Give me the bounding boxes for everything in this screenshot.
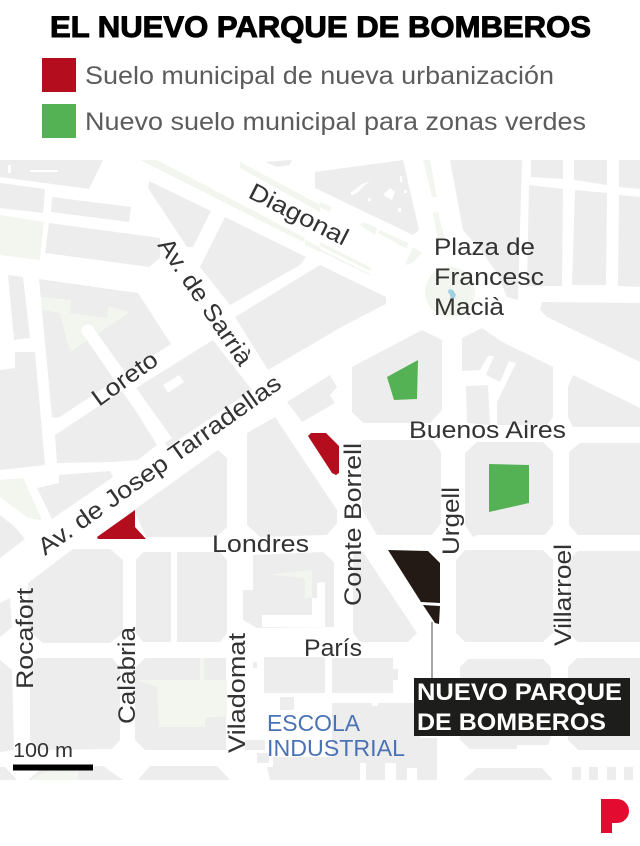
label: Plaza de Francesc Macià: Plaza de: [434, 234, 535, 261]
callout: new fire station: NUEVO PARQUE: [417, 679, 622, 706]
street labels: [12, 178, 577, 761]
label: París: París: [304, 635, 362, 662]
label: Plaza de Francesc Macià: Macià: [434, 294, 505, 321]
label: Escola Industrial: [267, 710, 405, 761]
label: Buenos Aires: Buenos Aires: [409, 417, 566, 444]
icon: publisher logo P: [601, 799, 629, 833]
label: Plaza de Francesc Macià: [434, 234, 544, 321]
legend item: new municipal land for green areas: Nuevo suelo municipal para zonas verdes: [85, 108, 586, 136]
label: Londres: Londres: [212, 531, 309, 558]
label: Escola Industrial: ESCOLA: [267, 710, 361, 736]
leader line to callout: [431, 622, 433, 678]
callout: new fire station: [414, 678, 630, 736]
red plot Comte Borrell: [308, 433, 339, 475]
map: [0, 160, 640, 780]
legend item: new urbanised municipal land: Suelo municipal de nueva urbanización: [85, 62, 554, 90]
scale bar: [13, 740, 93, 770]
legend item: new urbanised municipal land: [42, 58, 554, 92]
label: Villarroel: Villarroel: [550, 544, 577, 646]
legend: [42, 58, 586, 138]
label: Escola Industrial: INDUSTRIAL: [267, 735, 405, 761]
callout: new fire station: DE BOMBEROS: [417, 709, 606, 736]
label: Av. de Sarrià: Av. de Sarrià: [152, 233, 258, 371]
green zones, light: [0, 160, 475, 780]
label: Urgell: Urgell: [438, 487, 465, 555]
label: Rocafort: Rocafort: [12, 588, 39, 689]
label: Comte Borrell: Comte Borrell: [340, 443, 367, 606]
label: Diagonal: Diagonal: [244, 178, 353, 251]
green plot north: [387, 360, 418, 400]
scale bar: 100 m: [13, 740, 73, 762]
title: EL NUEVO PARQUE DE BOMBEROS: [50, 11, 591, 44]
city blocks: [0, 160, 640, 780]
fountain, Plaza de Francesc Macià: [448, 289, 456, 300]
green plot south: [489, 464, 529, 512]
road cuts and courtyards: [8, 165, 417, 780]
label: Loreto: Loreto: [87, 346, 163, 412]
label: Av. de Josep Tarradellas: Av. de Josep Tarradellas: [33, 370, 286, 561]
label: Plaza de Francesc Macià: Francesc: [434, 264, 544, 291]
label: Calàbria: Calàbria: [114, 626, 141, 724]
fire station plot: [388, 550, 440, 624]
red plot Tarradellas: [97, 510, 146, 539]
label: Viladomat: Viladomat: [224, 633, 251, 753]
